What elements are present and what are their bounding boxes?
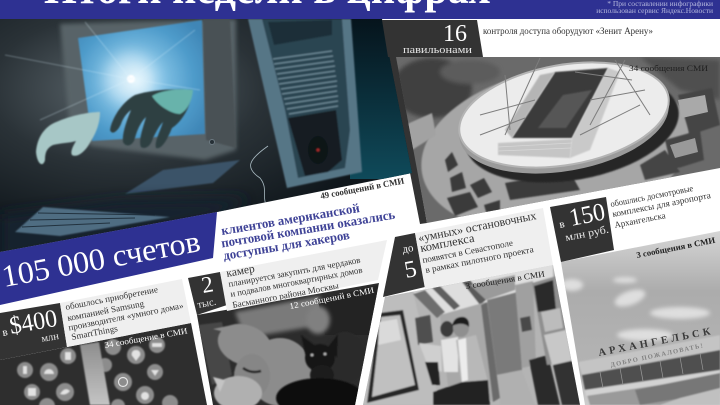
icon: pale hand: [36, 112, 100, 164]
panel: cats photo: [190, 280, 385, 405]
text: 150 description: обошлись досмотровые: [609, 183, 694, 209]
label: павильонами: павильонами: [403, 44, 472, 56]
caption: 3 mentions bus stop: 3 сообщения в СМИ: [465, 269, 545, 291]
bowl: [512, 68, 608, 138]
building: [578, 335, 720, 405]
panel: Arkhangelsk photo: [555, 228, 720, 405]
icon: dark hand: [110, 89, 193, 148]
footnote: [596, 0, 713, 15]
panel: $400 description: SmartThings: [70, 323, 119, 342]
text: 150 description: комплексы для аэропорта: [611, 190, 712, 219]
label: тыс.: тыс.: [197, 297, 217, 311]
kiosk right: [515, 281, 536, 368]
under-roof stands: [466, 91, 680, 183]
panel: 5 description: [415, 208, 553, 289]
label: млн: млн: [41, 331, 60, 345]
roof glass: [413, 262, 553, 315]
panel: 5 description: в рамках пилотного проекта: [424, 244, 534, 275]
panel: 5 tag: [383, 233, 425, 297]
sign: Добро пожаловать: ДОБРО ПОЖАЛОВАТЬ!: [610, 343, 703, 369]
sign: Архангельск: АРХАНГЕЛЬСК: [597, 326, 712, 359]
panel: 2 thousand description: и подвалов многоквартирных домов: [230, 265, 363, 299]
footnote: использован сервис Яндекс.Новости: [596, 6, 713, 15]
panel: 2 thousand description: планируется закупить для чердаков: [228, 255, 361, 289]
mouse pad and keyboard: [125, 160, 240, 194]
panel: main hacker photo: [0, 19, 420, 260]
stadium roof: [458, 61, 670, 168]
kiosk: [367, 310, 419, 403]
screen: [78, 20, 205, 141]
label: до: до: [401, 242, 415, 256]
text: stadium description: контроля доступа оборудуют «Зенит Арену»: [483, 26, 653, 36]
monitor casing: [60, 19, 236, 160]
panel: $400 description: обошлось приобретение: [64, 284, 159, 312]
headline: 105 000 счетов: 105 000 счетов: [0, 223, 203, 294]
number: 2: 2: [200, 271, 215, 298]
back glass: [440, 302, 495, 405]
panel: $400 description: [60, 279, 191, 347]
panel: 5 description: комплекса: [419, 231, 476, 255]
panel: stadium tag: [382, 20, 483, 57]
header band: [0, 0, 720, 19]
text: hacker description: доступны для хакеров: [222, 227, 351, 263]
panel: 150 tag: [550, 197, 614, 262]
text: hacker description: почтовой компании оказались: [220, 207, 396, 250]
text: 150 description: [609, 183, 712, 230]
panel: 5 description: появятся в Севастополе: [421, 238, 514, 265]
panel: 5 description: «умных» остановочных: [417, 208, 537, 245]
buildings right: [640, 88, 720, 180]
man: [456, 336, 487, 382]
panel: blue band: [0, 212, 217, 305]
panel: stadium photo: [396, 57, 720, 223]
text: камер: камер: [225, 263, 256, 280]
caption: stadium mentions: 34 сообщения СМИ: [629, 63, 708, 73]
panel: 2 thousand description: Басманного района Москвы: [232, 280, 340, 310]
icons: smart home circles: [17, 337, 178, 405]
panel: $400 description: компанией Samsung: [66, 298, 145, 323]
panel: $400 description: производителя «умного дома»: [67, 300, 184, 332]
panel: bus stop photo: [360, 260, 585, 405]
gray cats: [212, 317, 312, 405]
panel: smart home photo: [0, 320, 210, 405]
text: hacker description: [220, 200, 396, 263]
number: $400: $400: [7, 305, 59, 340]
black cat: [276, 332, 367, 405]
number: 150: 150: [567, 199, 607, 232]
computer tower: [248, 19, 362, 188]
panel: 2 thousand tag: [188, 271, 227, 315]
caption: 34 mentions: 34 сообщение в СМИ: [104, 326, 188, 350]
panel: dark strip beside stadium photo: [386, 50, 427, 224]
panel: $400 tag: [0, 303, 67, 360]
panel: 2 thousand description: [220, 240, 387, 311]
label: млн руб.: млн руб.: [564, 224, 610, 244]
blurred light strip: [80, 342, 110, 405]
cloth background: [235, 296, 322, 338]
left casing: [363, 292, 440, 405]
number: 16: 16: [443, 21, 467, 47]
label: в: в: [1, 326, 9, 339]
seated person: [419, 343, 442, 372]
woman: [440, 321, 454, 337]
caption: 49 mentions: 49 сообщений в СМИ: [320, 176, 405, 201]
number: 5: 5: [402, 256, 419, 284]
poster: [415, 315, 433, 345]
straw: [198, 322, 232, 385]
ground ring: [420, 80, 689, 217]
text: hacker description: клиентов американской: [220, 200, 361, 238]
label: в: в: [558, 218, 566, 231]
caption: 3 mentions Arkhangelsk: 3 сообщения в СМИ: [635, 235, 716, 260]
text: 150 description: Архангельска: [613, 210, 666, 230]
caption: 12 mentions: 12 сообщений в СМИ: [288, 285, 375, 311]
